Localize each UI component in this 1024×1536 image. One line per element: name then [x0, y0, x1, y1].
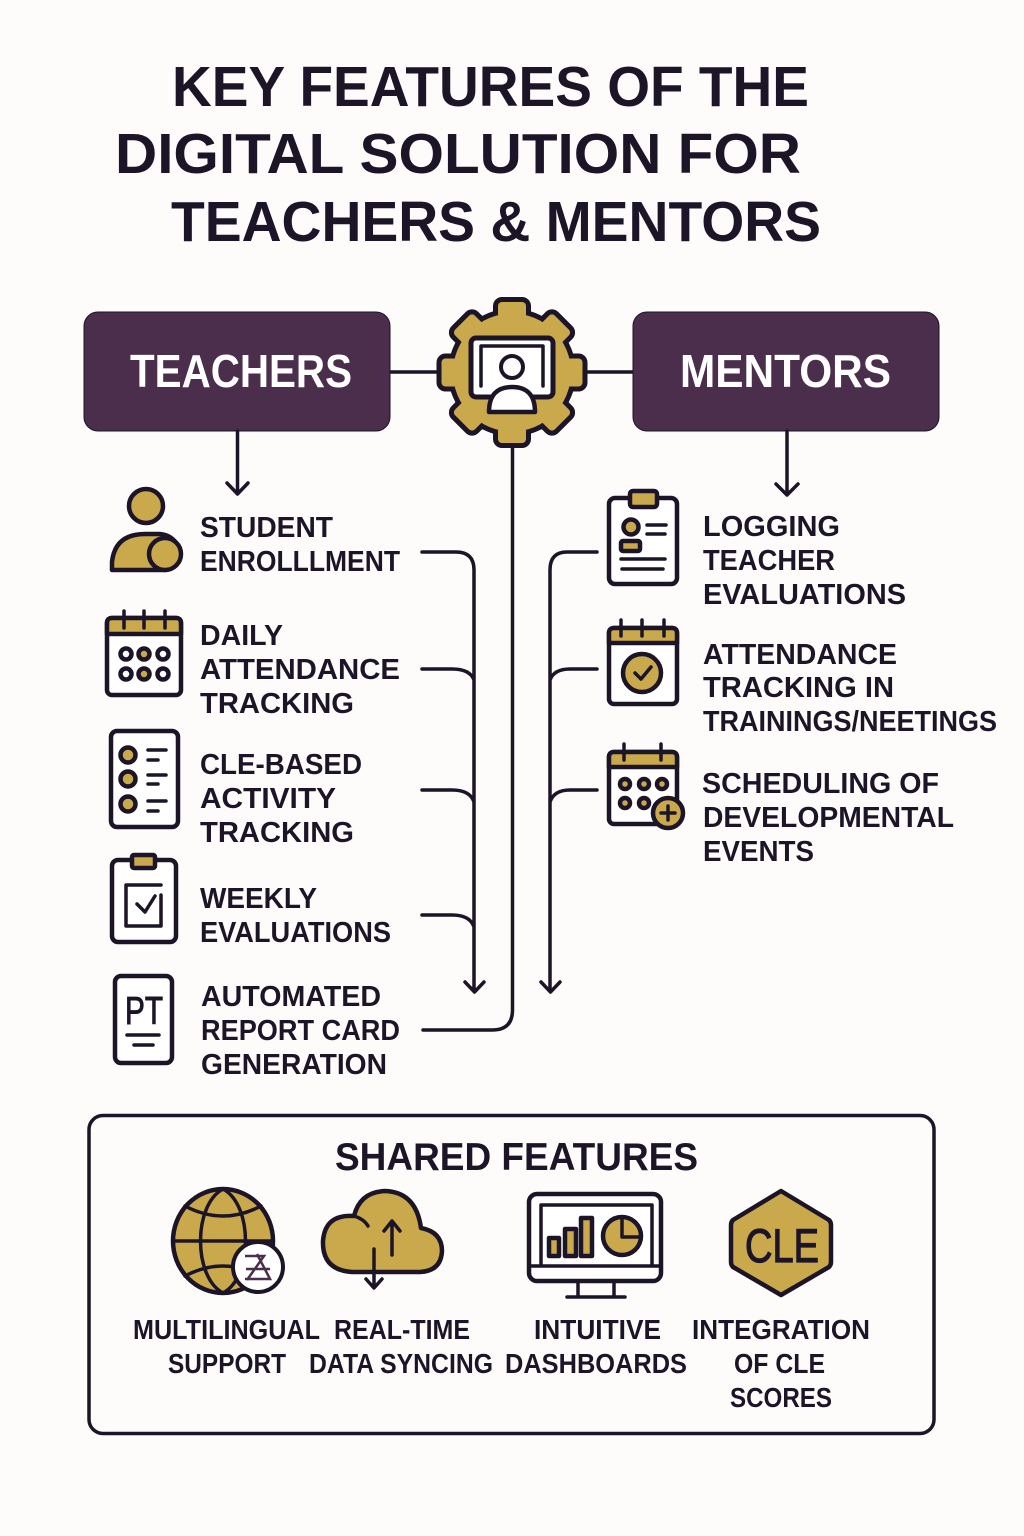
- icon: globe with language badge: [173, 1189, 283, 1293]
- text: automated report card generation: GENERATION: [201, 1049, 387, 1081]
- icon: CLE hexagon: [731, 1191, 831, 1295]
- text: attendance tracking in trainings: TRAININGS/NEETINGS: [703, 706, 997, 738]
- text: daily attendance tracking: [200, 620, 400, 720]
- arrow: mentors down: [776, 431, 798, 495]
- label: integration of cle scores: [692, 1314, 870, 1413]
- label: real-time data syncing: DATA SYNCING: [309, 1348, 493, 1379]
- panel: teachers header: [84, 312, 390, 431]
- icon: student enrollment: [112, 489, 181, 570]
- text: attendance tracking in trainings: ATTENDANCE: [703, 639, 897, 671]
- text: cle-based activity tracking: [200, 749, 362, 849]
- text: student enrollment: ENROLLLMENT: [200, 546, 400, 578]
- label: multilingual support: [133, 1314, 320, 1379]
- heading: shared features: SHARED FEATURES: [335, 1136, 698, 1179]
- label: integration of cle scores: OF CLE: [734, 1348, 825, 1379]
- icon: dashboard monitor: [529, 1194, 661, 1297]
- text: logging teacher evaluations: EVALUATIONS: [703, 579, 906, 611]
- text: scheduling developmental events: [702, 768, 954, 868]
- panel: mentors header: [633, 312, 939, 431]
- icon: calendar with plus: [609, 744, 683, 828]
- label: intuitive dashboards: INTUITIVE: [534, 1314, 661, 1345]
- title: DIGITAL SOLUTION FOR: [115, 122, 801, 186]
- connector: gear to mentors box: [586, 370, 634, 374]
- text: cle-based activity tracking: ACTIVITY: [200, 783, 336, 815]
- icon: clipboard with check: [112, 855, 176, 942]
- icon: CLE hexagon: CLE: [745, 1219, 819, 1272]
- arrow: mentor features collector: [541, 552, 597, 992]
- arrow: central trunk to report card: [423, 446, 512, 1030]
- text: cle-based activity tracking: TRACKING: [200, 817, 354, 849]
- connector: teachers box to gear: [390, 370, 438, 374]
- icon: report card PT: [115, 976, 172, 1063]
- arrow: teachers down: [227, 431, 248, 494]
- text: logging teacher evaluations: LOGGING: [703, 511, 840, 543]
- text: scheduling developmental events: SCHEDULING OF: [702, 768, 939, 800]
- text: cle-based activity tracking: CLE-BASED: [200, 749, 362, 781]
- icon: cloud sync: [323, 1191, 442, 1288]
- text: weekly evaluations: EVALUATIONS: [200, 917, 391, 949]
- icon: checklist: [111, 731, 178, 827]
- title: KEY FEATURES OF THE: [172, 55, 809, 119]
- text: daily attendance tracking: ATTENDANCE: [200, 654, 400, 686]
- label: intuitive dashboards: DASHBOARDS: [505, 1348, 687, 1379]
- text: daily attendance tracking: DAILY: [200, 620, 283, 652]
- icon: calendar with check: [609, 620, 677, 704]
- text: scheduling developmental events: DEVELOPMENTAL: [703, 802, 954, 834]
- icon: calendar daily attendance: [107, 611, 181, 695]
- text: automated report card generation: REPORT CARD: [201, 1015, 400, 1047]
- label: real-time data syncing: [309, 1314, 493, 1379]
- text: attendance tracking in trainings: [703, 639, 997, 738]
- label: multilingual support: SUPPORT: [168, 1348, 286, 1379]
- label: intuitive dashboards: [505, 1314, 687, 1379]
- text: daily attendance tracking: TRACKING: [200, 688, 354, 720]
- icon: report card PT: PT: [125, 990, 163, 1033]
- panel: teachers header: TEACHERS: [130, 345, 352, 397]
- title: TEACHERS & MENTORS: [171, 190, 821, 254]
- icon: central gear with presenter: [442, 302, 582, 443]
- label: real-time data syncing: REAL-TIME: [334, 1314, 470, 1345]
- label: multilingual support: MULTILINGUAL: [133, 1314, 320, 1345]
- text: attendance tracking in trainings: TRACKING IN: [703, 672, 894, 704]
- title: [115, 55, 821, 254]
- text: automated report card generation: AUTOMATED: [201, 981, 381, 1013]
- panel: mentors header: MENTORS: [680, 345, 891, 397]
- text: logging teacher evaluations: TEACHER: [703, 545, 835, 577]
- text: scheduling developmental events: EVENTS: [703, 836, 814, 868]
- arrow: teacher features collector: [422, 552, 484, 992]
- text: logging teacher evaluations: [703, 511, 906, 611]
- text: weekly evaluations: WEEKLY: [200, 883, 317, 915]
- text: weekly evaluations: [200, 883, 391, 949]
- text: automated report card generation: [201, 981, 400, 1081]
- text: student enrollment: [200, 512, 400, 578]
- text: student enrollment: STUDENT: [200, 512, 333, 544]
- icon: clipboard evaluation: [609, 491, 677, 584]
- label: integration of cle scores: SCORES: [730, 1382, 832, 1413]
- label: integration of cle scores: INTEGRATION: [692, 1314, 870, 1345]
- panel: shared features: [89, 1116, 934, 1434]
